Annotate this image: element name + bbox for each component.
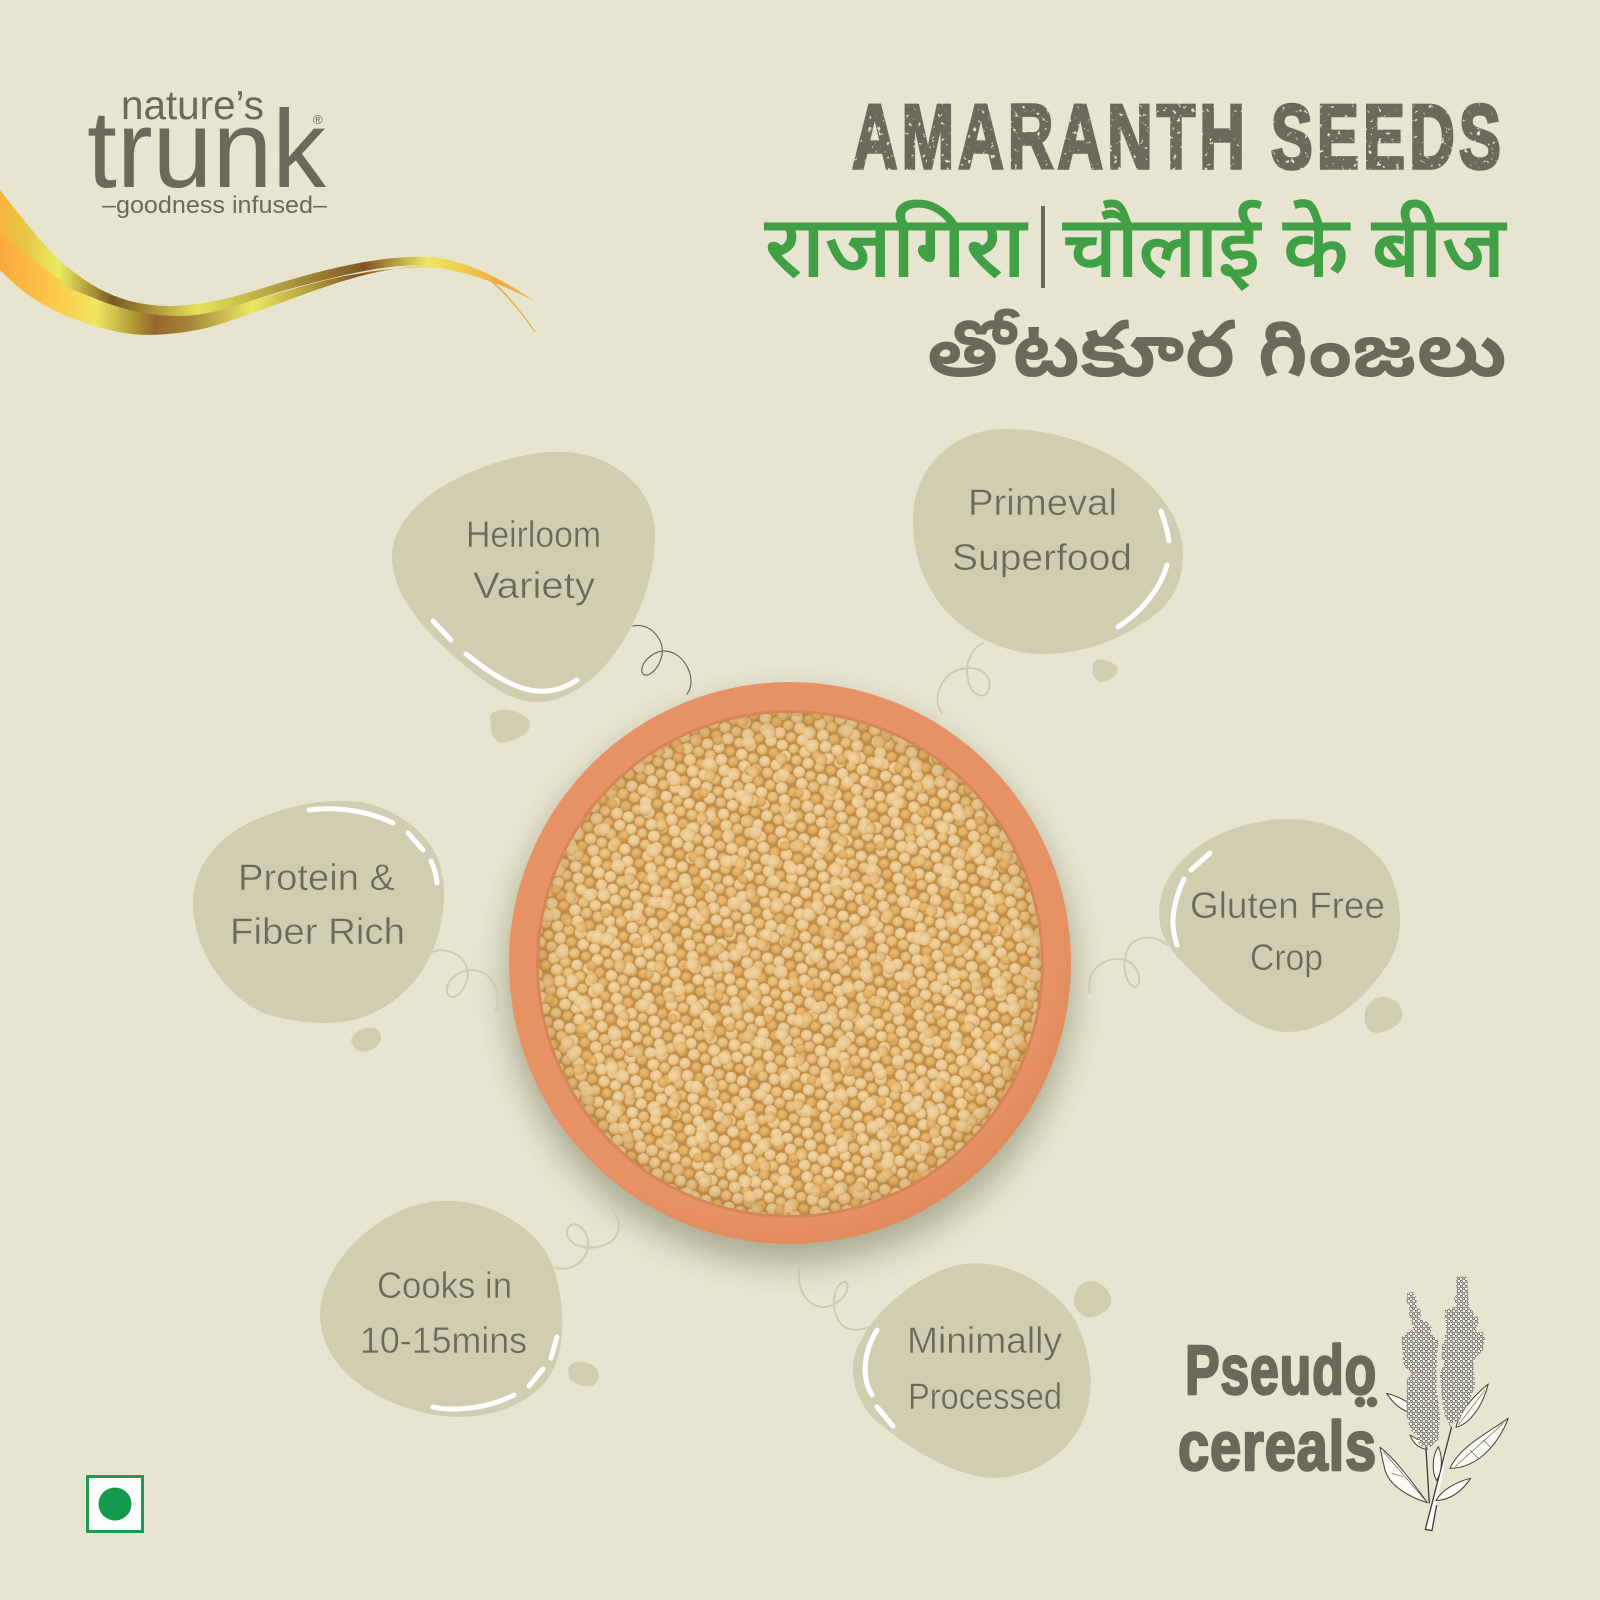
bubble (320, 1201, 562, 1417)
label line two: Fiber Rich (230, 911, 405, 952)
panel: heirloom variety (392, 452, 691, 743)
bubble (392, 452, 655, 702)
inner rim shade (538, 712, 1042, 1216)
label line one: Protein & (238, 857, 395, 898)
panel: primeval superfood (913, 429, 1183, 713)
highlights (1118, 511, 1169, 627)
label line one: Heirloom (466, 514, 601, 555)
logo word: trunk: trunk (87, 88, 327, 211)
left flower spike (1402, 1292, 1440, 1448)
curl connector (545, 1210, 619, 1269)
logo word: nature's: nature’s (121, 82, 264, 128)
seeds base (539, 713, 1041, 1215)
bubble (853, 1263, 1091, 1478)
bubble (913, 429, 1183, 654)
highlights (1173, 853, 1210, 945)
heading: hindi name one: राजगिरा (765, 200, 1027, 294)
divider bar (1041, 206, 1045, 288)
small bubble (568, 1362, 599, 1387)
label word: pseudo: Pseudo (1185, 1331, 1377, 1409)
highlights (433, 621, 577, 691)
bowl shadow (506, 696, 1074, 1264)
tagline: –goodness infused– (102, 192, 328, 219)
highlights (433, 1337, 557, 1409)
registered mark: ® (313, 112, 323, 127)
heading: telugu: తోటకూర గింజలు (927, 305, 1507, 393)
label line two: Processed (908, 1376, 1062, 1417)
bubble (1159, 819, 1400, 1032)
label dots (1356, 1398, 1376, 1406)
leaves (1380, 1384, 1508, 1503)
small bubble (490, 709, 530, 743)
panel: gluten free crop (1089, 819, 1402, 1033)
panel: cooks in 10-15 mins (320, 1201, 619, 1417)
curl connector (1089, 938, 1167, 993)
label line one: Minimally (907, 1320, 1062, 1361)
label line one: Gluten Free (1190, 885, 1385, 926)
label line one: Primeval (968, 482, 1117, 523)
curl connector (633, 625, 691, 694)
logo: nature's trunk (87, 82, 328, 219)
panel: minimally processed (799, 1263, 1111, 1478)
icon: vegetarian mark (88, 1476, 142, 1532)
clay bowl rim (509, 682, 1071, 1244)
label line two: Crop (1250, 937, 1323, 978)
panel: protein and fiber rich (193, 801, 498, 1052)
stems (1425, 1427, 1452, 1531)
bubble (193, 801, 444, 1023)
bowl of amaranth seeds (506, 682, 1074, 1264)
small bubble (1365, 997, 1402, 1033)
curl connector (938, 643, 989, 713)
curl connector (799, 1265, 873, 1330)
label line two: Superfood (952, 537, 1132, 578)
label line two: 10-15mins (360, 1320, 527, 1361)
seeds scatter second layer (539, 713, 1041, 1215)
seeds tone (539, 713, 1041, 1215)
title block (765, 87, 1507, 393)
label line one: Cooks in (377, 1265, 512, 1306)
small bubble (1074, 1281, 1111, 1317)
curl connector (430, 950, 498, 1010)
heading: hindi name two: चौलाई के बीज (1063, 200, 1507, 294)
label word: cereals: cereals (1178, 1407, 1377, 1485)
small bubble (351, 1028, 381, 1052)
gold swoosh (0, 190, 535, 335)
highlights (309, 809, 437, 883)
right flower spike (1440, 1277, 1485, 1427)
label line two: Variety (473, 565, 596, 606)
seeds scatter (539, 713, 1041, 1215)
pseudo cereals label (1178, 1331, 1377, 1485)
icon: amaranth plant (1380, 1277, 1508, 1531)
highlights (865, 1330, 893, 1426)
small bubble (1092, 659, 1118, 682)
